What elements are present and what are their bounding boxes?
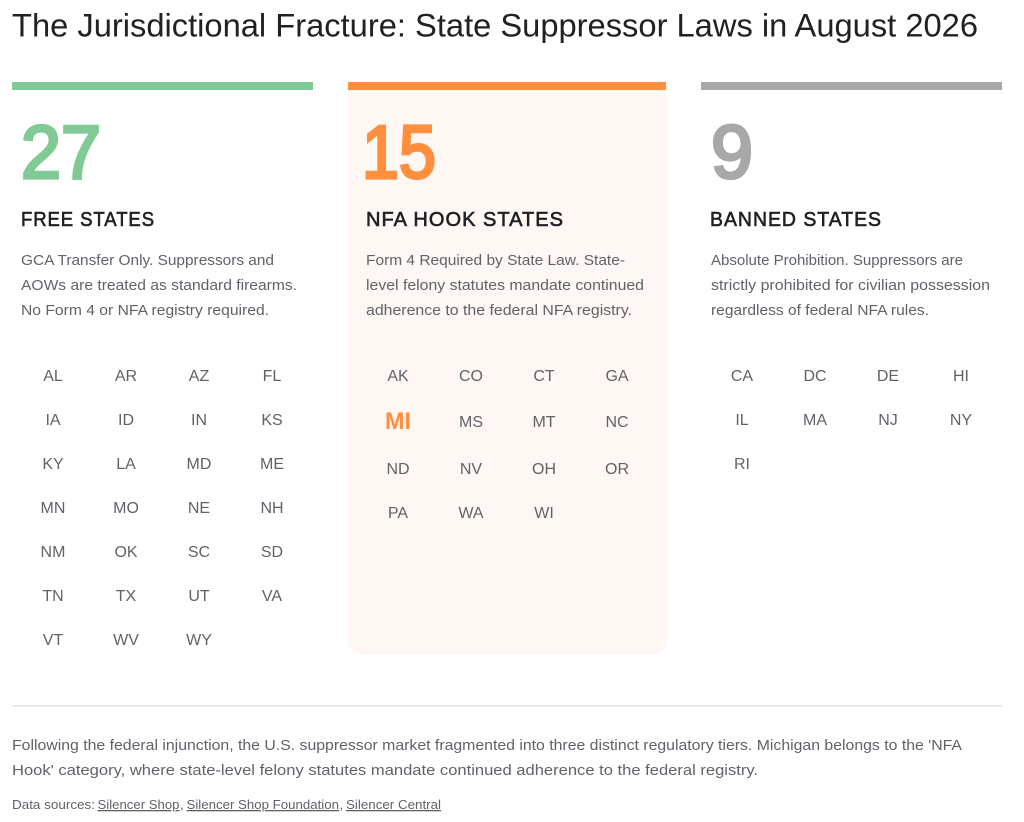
state list: free states: IN <box>191 412 207 429</box>
state list: free states: OK <box>114 544 138 561</box>
state list: banned states: CA <box>731 368 753 385</box>
description: free states: No Form 4 or NFA registry required. <box>21 302 269 319</box>
heading: banned states: BANNED STATES <box>710 209 882 231</box>
data sources: , <box>180 797 184 812</box>
accent bar: banned states <box>701 82 1002 90</box>
panel: banned states <box>701 82 1002 473</box>
state list: banned states <box>731 368 972 473</box>
accent bar: free states <box>12 82 313 90</box>
state list: NFA hook states: PA <box>388 505 408 522</box>
state list: NFA hook states: AK <box>387 368 409 385</box>
data sources: , <box>340 797 343 812</box>
state list: NFA hook states: OH <box>532 461 556 478</box>
summary text: Hook' category, where state-level felony statutes mandate continued adherence to the federal registry. <box>12 762 758 779</box>
state list: NFA hook states: NC <box>605 414 629 431</box>
description: NFA hook states: Form 4 Required by State Law. State- <box>366 252 625 269</box>
state list: free states: AR <box>115 368 137 385</box>
panel background <box>348 82 667 654</box>
state list: free states: NH <box>260 500 284 517</box>
state list: banned states: IL <box>735 412 749 429</box>
state list: free states: ID <box>118 412 134 429</box>
state list: free states: LA <box>116 456 136 473</box>
panel shadow <box>348 82 668 655</box>
heading: NFA hook states: NFA HOOK STATES <box>366 209 564 231</box>
description: NFA hook states: adherence to the federal NFA registry. <box>366 302 632 319</box>
state list: NFA hook states: WA <box>458 505 484 522</box>
panel: free states <box>12 82 313 649</box>
data sources: Silencer Shop <box>98 797 180 812</box>
state list: free states: MD <box>187 456 211 473</box>
state list: NFA hook states: CO <box>459 368 483 385</box>
state list: banned states: DE <box>877 368 899 385</box>
state list: free states: KS <box>261 412 283 429</box>
accent bar: NFA hook states <box>348 82 666 90</box>
state list: NFA hook states: CT <box>533 368 555 385</box>
state list: free states: AZ <box>189 368 209 385</box>
state list: free states: SD <box>261 544 283 561</box>
state list: free states <box>41 368 284 649</box>
panel: NFA hook states <box>348 82 668 655</box>
state list: NFA hook states: NV <box>460 461 482 478</box>
state list: free states: KY <box>42 456 64 473</box>
state list: free states: SC <box>188 544 210 561</box>
state list: NFA hook states: MI <box>385 408 411 435</box>
state list: free states: FL <box>263 368 281 385</box>
state list: banned states: NY <box>950 412 972 429</box>
state list: free states: IA <box>45 412 61 429</box>
state list: NFA hook states: WI <box>534 505 554 522</box>
description: banned states <box>711 252 990 319</box>
data sources: Silencer Central <box>346 797 441 812</box>
description: NFA hook states <box>366 252 644 319</box>
big number: 27: 27 <box>21 110 101 194</box>
state list: free states: TX <box>116 588 137 605</box>
state list: free states: WV <box>113 632 139 649</box>
state list: free states: TN <box>42 588 64 605</box>
state list: free states: UT <box>188 588 210 605</box>
big number: 9: 9 <box>711 110 753 194</box>
state list: free states: VT <box>43 632 63 649</box>
state list: free states: NE <box>188 500 210 517</box>
summary text <box>12 737 963 779</box>
state list: free states: AL <box>43 368 63 385</box>
state list: banned states: DC <box>803 368 827 385</box>
title: The Jurisdictional Fracture: State Suppressor Laws in August 2026 <box>12 8 978 44</box>
description: free states: GCA Transfer Only. Suppressors and <box>21 252 274 269</box>
state list: free states: NM <box>41 544 65 561</box>
description: banned states: Absolute Prohibition. Suppressors are <box>711 252 963 269</box>
state list: free states: MO <box>113 500 139 517</box>
state list: NFA hook states: MT <box>532 414 556 431</box>
state list: free states: ME <box>260 456 284 473</box>
state list: NFA hook states: OR <box>605 461 629 478</box>
state list: banned states: NJ <box>878 412 898 429</box>
state list: NFA hook states <box>385 368 629 522</box>
description: banned states: regardless of federal NFA rules. <box>711 302 929 319</box>
description: banned states: strictly prohibited for civilian possession <box>711 277 990 294</box>
description: free states <box>21 252 297 319</box>
state list: NFA hook states: ND <box>386 461 410 478</box>
big number: 15: 15 <box>362 110 436 194</box>
heading: free states: FREE STATES <box>21 209 155 231</box>
description: NFA hook states: level felony statutes mandate continued <box>366 277 644 294</box>
data sources: Data sources: <box>12 797 95 812</box>
state list: free states: VA <box>262 588 282 605</box>
state list: free states: MN <box>41 500 65 517</box>
description: free states: AOWs are treated as standard firearms. <box>21 277 297 294</box>
state list: free states: WY <box>186 632 212 649</box>
data sources <box>12 797 441 812</box>
state list: NFA hook states: MS <box>459 414 483 431</box>
data sources: Silencer Shop Foundation <box>186 797 339 812</box>
state list: banned states: RI <box>734 456 750 473</box>
state list: NFA hook states: GA <box>605 368 629 385</box>
summary text: Following the federal injunction, the U.S. suppressor market fragmented into three distinct regulatory tiers. Michigan belongs to the 'NFA <box>12 737 963 754</box>
state list: banned states: MA <box>803 412 827 429</box>
state list: banned states: HI <box>953 368 969 385</box>
